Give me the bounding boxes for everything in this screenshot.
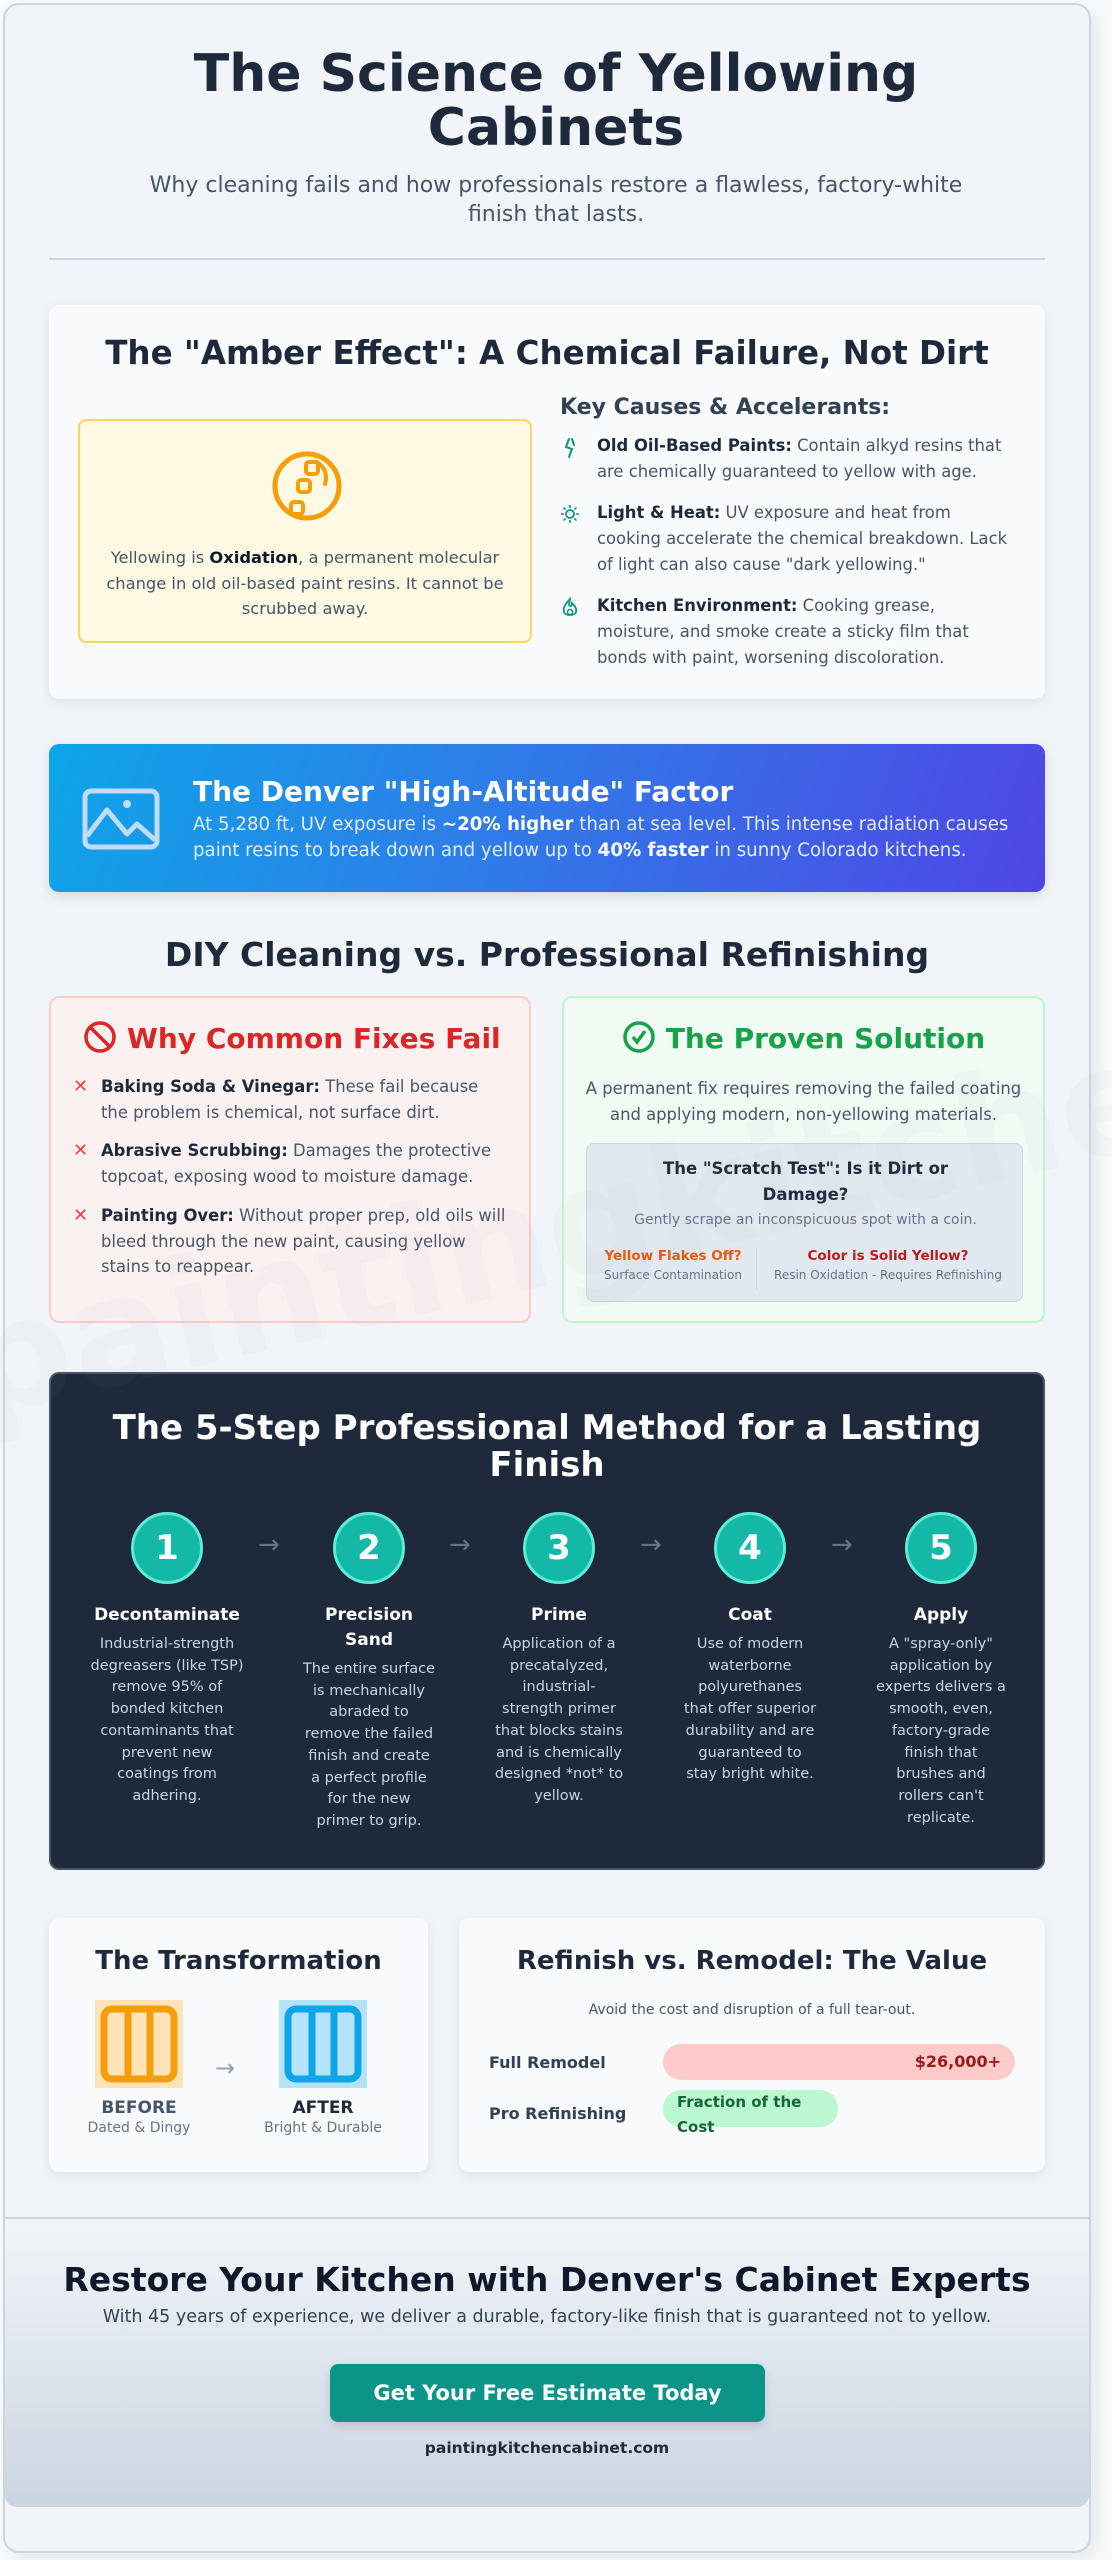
panel: amber effect [49,305,1045,699]
heading: key causes: Key Causes & Accelerants: [560,395,890,420]
step 5: Apply [914,1605,968,1625]
step 1: coatings from adhering. [117,1766,217,1804]
footer band [5,2217,1089,2507]
icon: molecule [272,452,342,520]
arrow: → [449,1530,471,1560]
step 2: Sand [345,1630,393,1650]
fail: scrubbing: ✕ [73,1140,88,1161]
callout: oxidation [78,419,532,643]
heading: 5-step: The 5-Step Professional Method for a Lasting Finish [113,1408,981,1485]
step 2: 2 [357,1528,381,1568]
CTA footer [63,2260,1031,2327]
heading: solution: The Proven Solution [666,1022,985,1055]
test outcomes: Yellow Flakes Off? [604,1248,742,1264]
step 4: 4 [738,1528,762,1568]
cause: oil paints: Old Oil-Based Paints: Contain alkyd resins that are chemically guaranteed to yellow with age. [597,436,1001,481]
list: causes [561,436,1007,667]
heading: DIY vs pro: DIY Cleaning vs. Professional Refinishing [165,935,929,974]
heading: fail: Why Common Fixes Fail [127,1022,501,1055]
panel: proven solution [562,996,1045,1323]
text: solution: A permanent fix requires removing the failed coating and applying modern, non-yellowing materials. [586,1079,1021,1124]
url: paintingkitchencabinet.com [425,2439,669,2457]
CTA footer: With 45 years of experience, we deliver a durable, factory-like finish that is guaranteed not to yellow. [103,2307,991,2327]
bar chart: cost: Full Remodel [489,2053,606,2072]
bar chart: cost: $26,000+ [915,2052,1001,2071]
panel: transformation [49,1918,428,2172]
subtitle: Why cleaning fails and how professionals restore a flawless, factory-white finish that lasts. [150,173,962,227]
heading: amber effect: The "Amber Effect": A Chemical Failure, Not Dirt [105,334,989,372]
button: Get Your Free Estimate Today [373,2381,722,2405]
banner text: At 5,280 ft, UV exposure is ~20% higher than at sea level. This intense radiation causes paint resins to break down and yellow up to 40% faster in sunny Colorado kitchens. [193,814,1008,861]
heading: CTA: Restore Your Kitchen with Denver's Cabinet Experts [63,2260,1031,2299]
step 3: Application of a precatalyzed, industrial-strength primer that blocks stains and is chemically designed *not* to yellow. [495,1636,623,1804]
step 4: Use of modern waterborne polyurethanes that offer superior durability and are guaranteed to stay bright white. [684,1636,816,1782]
callout: scratch test: The "Scratch Test": Is it Dirt or Damage? [663,1159,948,1204]
step 2: The entire surface is mechanically abraded to remove the failed finish and create a perfect profile for the new primer to grip. [303,1661,435,1829]
arrow: → [640,1530,662,1560]
icon: after cabinet [264,2000,382,2136]
bar chart: cost [489,2044,1015,2136]
arrow: → [258,1530,280,1560]
panel: 5-step method [49,1372,1045,1870]
step 1: Industrial-strength degreasers (like TSP) remove 95% of bonded kitchen contaminants that prevent new [91,1636,243,1761]
test outcomes: Color is Solid Yellow? [808,1248,968,1264]
icon: before cabinet: BEFORE [101,2098,177,2118]
test outcomes: Surface Contamination [604,1268,742,1282]
bar chart: cost: Pro Refinishing [489,2104,626,2123]
bar chart: cost: Fraction of the Cost [677,2093,801,2136]
steps row [91,1512,1006,1829]
icon: mountain image [82,788,160,850]
cause: light heat: Light & Heat: UV exposure and heat from cooking accelerate the chemical breakdown. Lack of light can also cause "dark yellowing." [597,503,1007,574]
icon: after cabinet: AFTER [292,2098,354,2118]
step 4 [684,1512,816,1782]
fail: baking soda: the problem is chemical, not surface dirt. [101,1103,440,1122]
fail: baking soda: Baking Soda & Vinegar: These fail because [101,1077,478,1096]
banner heading: The Denver "High-Altitude" Factor [193,775,733,808]
step 3 [495,1512,623,1804]
step 2 [302,1512,435,1829]
step 4: Coat [728,1605,772,1625]
arrow: → [215,2054,235,2082]
step 1 [91,1512,243,1804]
heading: transformation: The Transformation [95,1946,382,1976]
fail: baking soda [73,1076,478,1122]
fail: painting over: Painting Over: Without proper prep, old oils will bleed through the new paint, causing yellow stains to reappear. [101,1206,505,1276]
panel: why fixes fail [49,996,531,1323]
test outcomes [604,1248,1002,1290]
arrow: → [831,1530,853,1560]
step 5 [876,1512,1006,1826]
step 5: 5 [929,1528,953,1568]
callout: scratch test [586,1143,1023,1302]
cause: kitchen: Kitchen Environment: Cooking grease, moisture, and smoke create a sticky film that bonds with paint, worsening discoloration. [597,596,969,667]
test outcomes: Resin Oxidation - Requires Refinishing [774,1268,1002,1282]
icon: before cabinet [88,2000,190,2136]
text: oxidation: Yellowing is Oxidation, a permanent molecular change in old oil-based paint resins. It cannot be scrubbed away. [106,548,504,618]
icon: after cabinet: Bright & Durable [264,2120,382,2136]
callout: scratch test: Gently scrape an inconspicuous spot with a coin. [634,1212,977,1228]
panel: refinish vs remodel: Avoid the cost and disruption of a full tear-out. [589,2002,915,2018]
step 1: Decontaminate [94,1605,240,1625]
heading: value: Refinish vs. Remodel: The Value [517,1946,987,1976]
step 5: A "spray-only" application by experts delivers a smooth, even, factory-grade finish that brushes and rollers can't replicate. [876,1636,1006,1826]
fail: painting over: ✕ [73,1205,88,1226]
icon: before cabinet: Dated & Dingy [88,2120,190,2136]
fail: baking soda: ✕ [73,1076,88,1097]
step 3: 3 [547,1528,571,1568]
list: fails [73,1076,505,1276]
title: The Science of Yellowing Cabinets [194,44,918,158]
fail: scrubbing: Abrasive Scrubbing: Damages the protective topcoat, exposing wood to moisture damage. [101,1141,491,1186]
panel: refinish vs remodel [459,1918,1045,2172]
step 2: Precision [325,1605,413,1625]
button [330,2364,765,2422]
banner: denver factor [49,744,1045,892]
step 1: 1 [155,1528,179,1568]
step 3: Prime [531,1605,587,1625]
